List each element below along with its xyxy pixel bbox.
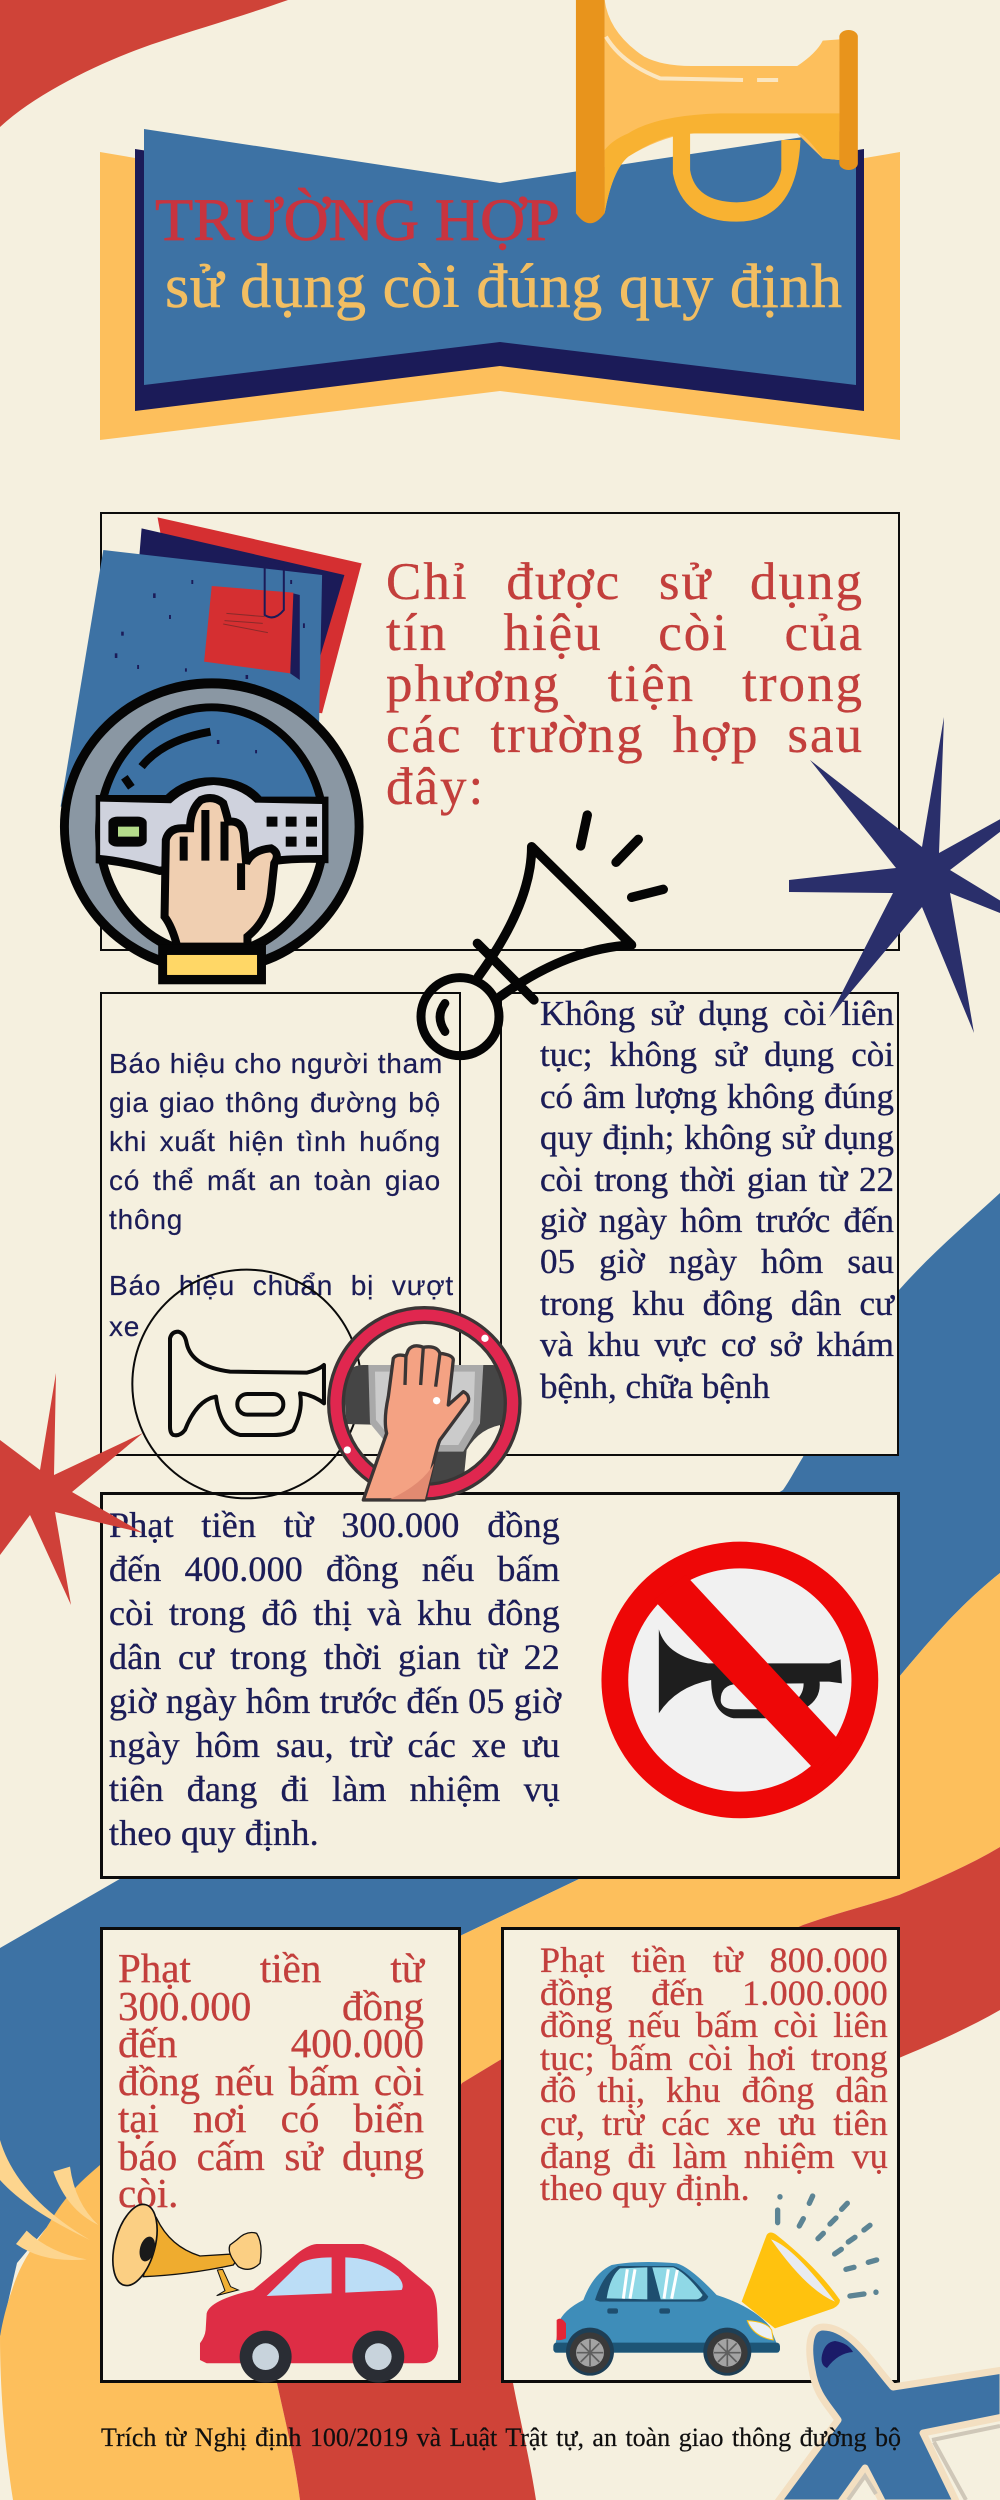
icon: blue car with megaphone [553,2196,877,2376]
background: blue ribbon [0,1193,1000,2337]
text: overtaking signal: Báo hiệu chuẩn bị vượt [109,1270,454,1301]
panel: night-time fine [100,1492,900,1879]
background: red ribbon [277,1847,1000,2500]
text: fine 800.000 to 1.000.000: theo quy định. [540,2168,750,2208]
panel: fine at no-horn sign [100,1927,461,2383]
text: fine 300.000 to 400.000 at night: theo quy định. [109,1813,319,1853]
icon: no horn prohibition sign [601,1542,878,1818]
text: fine 800.000 to 1.000.000: Phạt tiền từ 800.000 [540,1940,888,1980]
heading: conditions for horn use [386,552,864,816]
panel: only use the horn when [100,512,900,951]
icon: pale yellow sound rays [0,2140,98,2260]
text: fine 800.000 to 1.000.000 [540,1940,888,2208]
text: danger warning [109,1048,443,1236]
text: no continuous horn: giờ ngày hôm trước đến [540,1201,894,1240]
text: overtaking signal [109,1270,454,1342]
heading: conditions for horn use: đây: [386,758,485,816]
text: no continuous horn [540,994,896,1406]
text: fine 300.000 to 400.000 at night: ngày hôm sau, trừ các xe ưu [109,1725,560,1765]
text: fine 300.000 to 400.000 at night: tiên đang đi làm nhiệm vụ [109,1769,560,1809]
icon: navy burst star [789,717,1000,1033]
text: danger warning: Báo hiệu cho người tham [109,1048,443,1079]
text: fine 300.000 to 400.000 at night: còi trong đô thị và khu đông [109,1593,560,1633]
background: yellow ribbon [0,1573,1000,2500]
title: cases of correct horn use [155,187,842,321]
text: fine at no-horn sign: đồng nếu bấm còi [118,2058,424,2104]
icon: steering wheel with hand [60,678,364,984]
icon: golden horn at top [576,0,858,223]
text: fine 300.000 to 400.000 at night: dân cư trong thời gian từ 22 [109,1637,560,1677]
text: fine 300.000 to 400.000 at night: Phạt tiền từ 300.000 đồng [109,1505,560,1545]
text: no continuous horn: Không sử dụng còi liên [540,994,894,1033]
text: no continuous horn: tục; không sử dụng còi [540,1035,894,1074]
text: fine at no-horn sign: báo cấm sử dụng [118,2133,424,2179]
panel: allowed cases [100,992,461,1456]
text: no continuous horn: và khu vực cơ sở khám [540,1325,894,1364]
icon: red burst star [0,1373,143,1605]
title book graphic [100,129,900,440]
icon: black outline megaphone [421,815,663,1056]
panel: fine for air horn [501,1927,900,2383]
text: fine at no-horn sign: Phạt tiền từ [118,1945,424,1991]
text: overtaking signal: xe [109,1311,140,1342]
background: red corner swoosh [0,0,288,127]
text: fine 800.000 to 1.000.000: cư, trừ các xe ưu tiên [540,2103,888,2143]
icon: red car with golden horn [105,2200,438,2383]
text: danger warning: có thể mất an toàn giao [109,1165,441,1196]
text: danger warning: gia giao thông đường bộ [109,1087,441,1118]
heading: conditions for horn use: tín hiệu còi của [386,604,864,662]
text: fine 300.000 to 400.000 at night: đến 400.000 đồng nếu bấm [109,1549,560,1589]
text: fine at no-horn sign: tại nơi có biển [118,2095,424,2141]
title: cases of correct horn use: sử dụng còi đúng quy định [165,253,842,321]
text: fine 800.000 to 1.000.000: đồng đến 1.000.000 [540,1973,888,2013]
text: no continuous horn: 05 giờ ngày hôm sau [540,1242,894,1281]
text: no continuous horn: quy định; không sử dụng [540,1118,894,1157]
text: fine at no-horn sign: còi. [118,2170,178,2216]
text: no continuous horn: còi trong thời gian từ 22 [540,1160,894,1199]
icon: blue airplane [777,2327,1000,2500]
text: no continuous horn: bệnh, chữa bệnh [540,1367,770,1406]
title: cases of correct horn use: TRƯỜNG HỢP [155,187,560,253]
heading: conditions for horn use: Chỉ được sử dụng [386,552,864,610]
text: fine at no-horn sign [118,1945,426,2216]
text: fine 800.000 to 1.000.000: đang đi làm nhiệm vụ [540,2136,888,2176]
text: fine 800.000 to 1.000.000: đồng nếu bấm còi liên [540,2005,888,2045]
text: danger warning: thông [109,1204,183,1235]
heading: conditions for horn use: các trường hợp sau [386,706,864,764]
text: fine 300.000 to 400.000 at night: giờ ngày hôm trước đến 05 giờ [109,1681,561,1721]
text: fine 300.000 to 400.000 at night [109,1505,562,1853]
panel: prohibited horn use [500,992,899,1456]
text: no continuous horn: có âm lượng không đúng [540,1077,894,1116]
text: no continuous horn: trong khu đông dân cư [540,1284,894,1323]
icon: document folder [61,517,362,807]
footer: legal source note: Trích từ Nghị định 100/2019 và Luật Trật tự, an toàn giao thông đường bộ [101,2423,901,2452]
heading: conditions for horn use: phương tiện trong [386,655,864,713]
icon: red steering wheel with hand [329,1308,520,1500]
text: fine at no-horn sign: đến 400.000 [118,2020,424,2066]
text: fine 800.000 to 1.000.000: đô thị, khu đông dân [540,2070,888,2110]
icon: outlined horn in thin circle [132,1270,361,1498]
text: fine 800.000 to 1.000.000: tục; bấm còi hơi trong [540,2038,888,2078]
text: danger warning: khi xuất hiện tình huống [109,1126,441,1157]
text: fine at no-horn sign: 300.000 đồng [118,1983,424,2029]
